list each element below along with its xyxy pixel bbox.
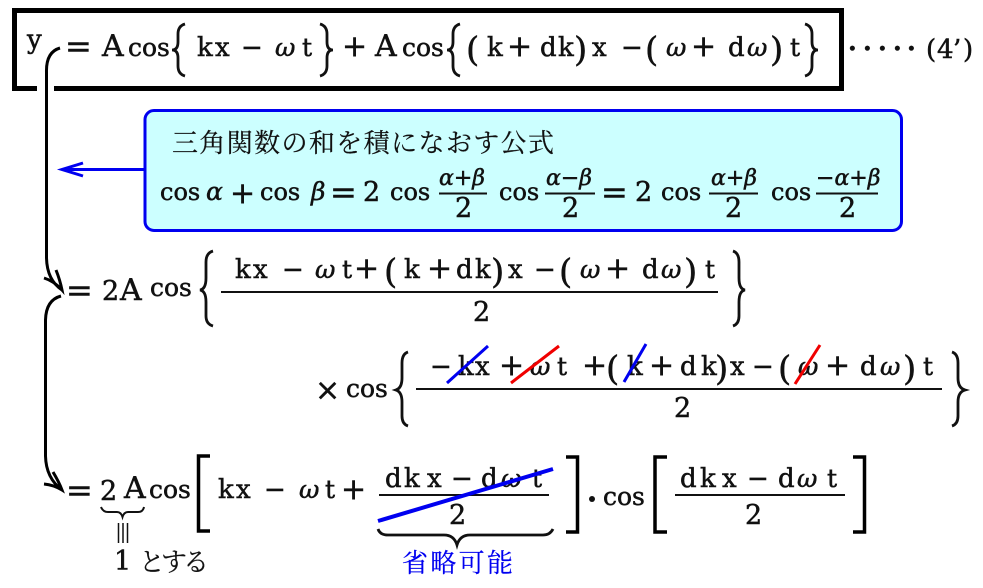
- equation text: cos: [402, 33, 444, 62]
- step 2: result equation: d: [778, 464, 795, 494]
- formula: cos: [390, 178, 430, 206]
- equation text: [26, 24, 818, 76]
- equation frame: [14, 10, 842, 88]
- step 1: second cosine factor: (: [778, 349, 791, 389]
- step 1: second cosine factor: ω: [530, 352, 550, 381]
- boxed equation (4'): [14, 10, 842, 88]
- note: negligible: 省略可能: [402, 549, 513, 578]
- equation text: x: [592, 33, 607, 63]
- equation text: ): [574, 30, 587, 70]
- formula: =: [601, 173, 628, 211]
- step 1: first cosine factor: 2: [473, 297, 490, 328]
- equation text: kx: [197, 33, 230, 63]
- formula: 2: [635, 177, 652, 208]
- formula: cos: [260, 178, 300, 206]
- formula: 2: [455, 193, 472, 224]
- step 2: result equation: −: [747, 464, 769, 494]
- step 1: second cosine factor: 2: [674, 393, 691, 424]
- step 1: second cosine factor: k: [627, 352, 643, 382]
- step 1: first cosine factor: x: [508, 255, 523, 285]
- formula: α: [206, 177, 223, 206]
- panel heading: 三角関数の和を積になおす公式: [172, 129, 554, 158]
- step 2: result equation: t: [532, 464, 542, 493]
- step 1: first cosine factor: t: [705, 255, 715, 284]
- step 1: second cosine factor: −: [752, 352, 774, 382]
- step 1: first cosine factor: −: [282, 255, 304, 285]
- equation text: −: [241, 33, 263, 63]
- step 2: result equation: 2: [449, 500, 466, 531]
- step 2: result equation: cos: [603, 482, 645, 511]
- step 1: first cosine factor: −: [534, 255, 556, 285]
- step 2: result equation: t: [325, 475, 335, 504]
- step 2: result equation: [66, 456, 864, 532]
- equation text: y: [26, 25, 42, 55]
- formula: α−β: [546, 166, 592, 191]
- step 2: result equation: +: [341, 472, 366, 507]
- step 1: first cosine factor: (: [384, 252, 397, 292]
- step 1: first cosine factor: (: [559, 252, 572, 292]
- formula: 2: [363, 177, 380, 208]
- step 1: second cosine factor: ω: [798, 352, 818, 381]
- step 1: first cosine factor: +: [605, 251, 630, 286]
- step 1: second cosine factor: +: [825, 348, 850, 383]
- step 1: second cosine factor: +: [582, 348, 607, 383]
- step 1: first cosine factor: 2: [102, 276, 119, 307]
- formula: +: [230, 176, 255, 211]
- equation text: =: [65, 27, 92, 65]
- step 2: result equation: −: [451, 464, 473, 494]
- step 2: result equation: −: [264, 475, 286, 505]
- step 2: result equation: dkx: [680, 464, 737, 494]
- step 2: result equation: 2: [745, 500, 762, 531]
- equation text: +: [342, 29, 367, 64]
- equation text: t: [790, 33, 800, 62]
- step 2: result equation: 2: [100, 476, 117, 507]
- step 2: result equation: t: [827, 464, 837, 493]
- step 1: first cosine factor: +: [427, 251, 452, 286]
- underbrace: negligible term: [378, 529, 553, 545]
- step 1: first cosine factor: cos: [150, 273, 192, 302]
- step 2: result equation: A: [123, 471, 146, 506]
- formula: =: [330, 173, 357, 211]
- step 2: result equation: ω: [797, 464, 817, 493]
- step 1: second cosine factor: d: [860, 352, 877, 382]
- strike-through of negligible term: [378, 469, 553, 521]
- step 2: result equation: d: [481, 464, 498, 494]
- step 1: first cosine factor: =: [66, 271, 93, 309]
- panel background: [145, 110, 902, 230]
- step 1: first cosine factor: t: [342, 255, 352, 284]
- step 1: second cosine factor: t: [923, 352, 933, 381]
- step 1: first cosine factor: ω: [661, 255, 681, 284]
- step 2: result equation: dkx: [385, 464, 442, 494]
- step 1: second cosine factor: ω: [880, 352, 900, 381]
- step 1: second cosine factor: −: [430, 352, 452, 382]
- equation number (4'): ·····: [848, 34, 916, 63]
- connector arrow: first step: [44, 48, 62, 290]
- connector arrow: second step: [44, 296, 62, 490]
- formula: 2: [725, 193, 742, 224]
- formula: cos: [771, 178, 811, 206]
- step 1: second cosine factor: dk: [680, 352, 717, 382]
- step 1: second cosine factor: +: [649, 348, 674, 383]
- equation text: ω: [747, 33, 767, 62]
- formula: α+β: [711, 166, 757, 191]
- equation text: ): [770, 30, 783, 70]
- text: (4’): [926, 35, 973, 65]
- formula: 2: [562, 193, 579, 224]
- step 1: second cosine factor: ): [715, 349, 728, 389]
- formula: β: [310, 177, 325, 206]
- step 1: second cosine factor: x: [730, 352, 745, 382]
- equation text: −: [621, 33, 643, 63]
- formula: [160, 166, 880, 224]
- step 2: result equation: =: [66, 471, 93, 509]
- underbrace: 2A equals 1: [101, 507, 144, 577]
- step 1: first cosine factor: k: [404, 255, 420, 285]
- step 1: first cosine factor: +: [354, 251, 379, 286]
- formula: 2: [839, 193, 856, 224]
- cancel strokes: [447, 344, 820, 384]
- step 1: first cosine factor: ): [491, 252, 504, 292]
- equation text: A: [101, 29, 124, 64]
- equation text: k: [487, 33, 503, 63]
- panel: sum-to-product formula: [145, 110, 902, 230]
- step 1: first cosine factor: dk: [456, 255, 491, 285]
- formula: cos: [160, 178, 200, 206]
- step 1: first cosine factor: kx: [235, 255, 268, 285]
- step 1: first cosine factor: ω: [315, 255, 335, 284]
- step 1: second cosine factor: t: [557, 352, 567, 381]
- formula: cos: [499, 178, 539, 206]
- step 1: second cosine factor: [315, 344, 965, 426]
- equation text: +: [691, 29, 716, 64]
- formula: α+β: [439, 166, 485, 191]
- equation text: (: [466, 30, 479, 70]
- equation text: (: [645, 30, 658, 70]
- arrow: formula applied to equation: [62, 163, 144, 176]
- equation text: +: [507, 29, 532, 64]
- step 1: first cosine factor: d: [642, 255, 659, 285]
- step 1: first cosine factor: [66, 251, 745, 328]
- formula: cos: [661, 178, 701, 206]
- equation text: t: [302, 33, 312, 62]
- equivalence mark: [118, 523, 128, 543]
- equation text: dk: [540, 33, 574, 63]
- step 2: result equation: ω: [299, 475, 319, 504]
- step 1: second cosine factor: +: [499, 348, 524, 383]
- step 1: second cosine factor: (: [606, 349, 619, 389]
- equation text: ω: [666, 33, 686, 62]
- step 1: first cosine factor: ω: [580, 255, 600, 284]
- step 2: result equation: cos: [149, 475, 191, 504]
- step 1: second cosine factor: ×: [315, 373, 340, 408]
- step 1: first cosine factor: A: [119, 273, 142, 308]
- step 1: second cosine factor: cos: [346, 374, 388, 403]
- note: set to 1: 1: [114, 546, 131, 577]
- note: set to 1, kana: とする: [139, 548, 209, 577]
- step 1: second cosine factor: kx: [458, 352, 490, 382]
- step 2: result equation: ω: [501, 464, 521, 493]
- step 2: result equation: kx: [218, 475, 251, 505]
- equation text: d: [728, 33, 745, 63]
- equation text: A: [374, 29, 397, 64]
- formula: −α+β: [816, 166, 880, 191]
- equation text: ω: [275, 33, 295, 62]
- step 1: first cosine factor: ): [684, 252, 697, 292]
- equation text: cos: [128, 33, 170, 62]
- step 1: second cosine factor: ): [903, 349, 916, 389]
